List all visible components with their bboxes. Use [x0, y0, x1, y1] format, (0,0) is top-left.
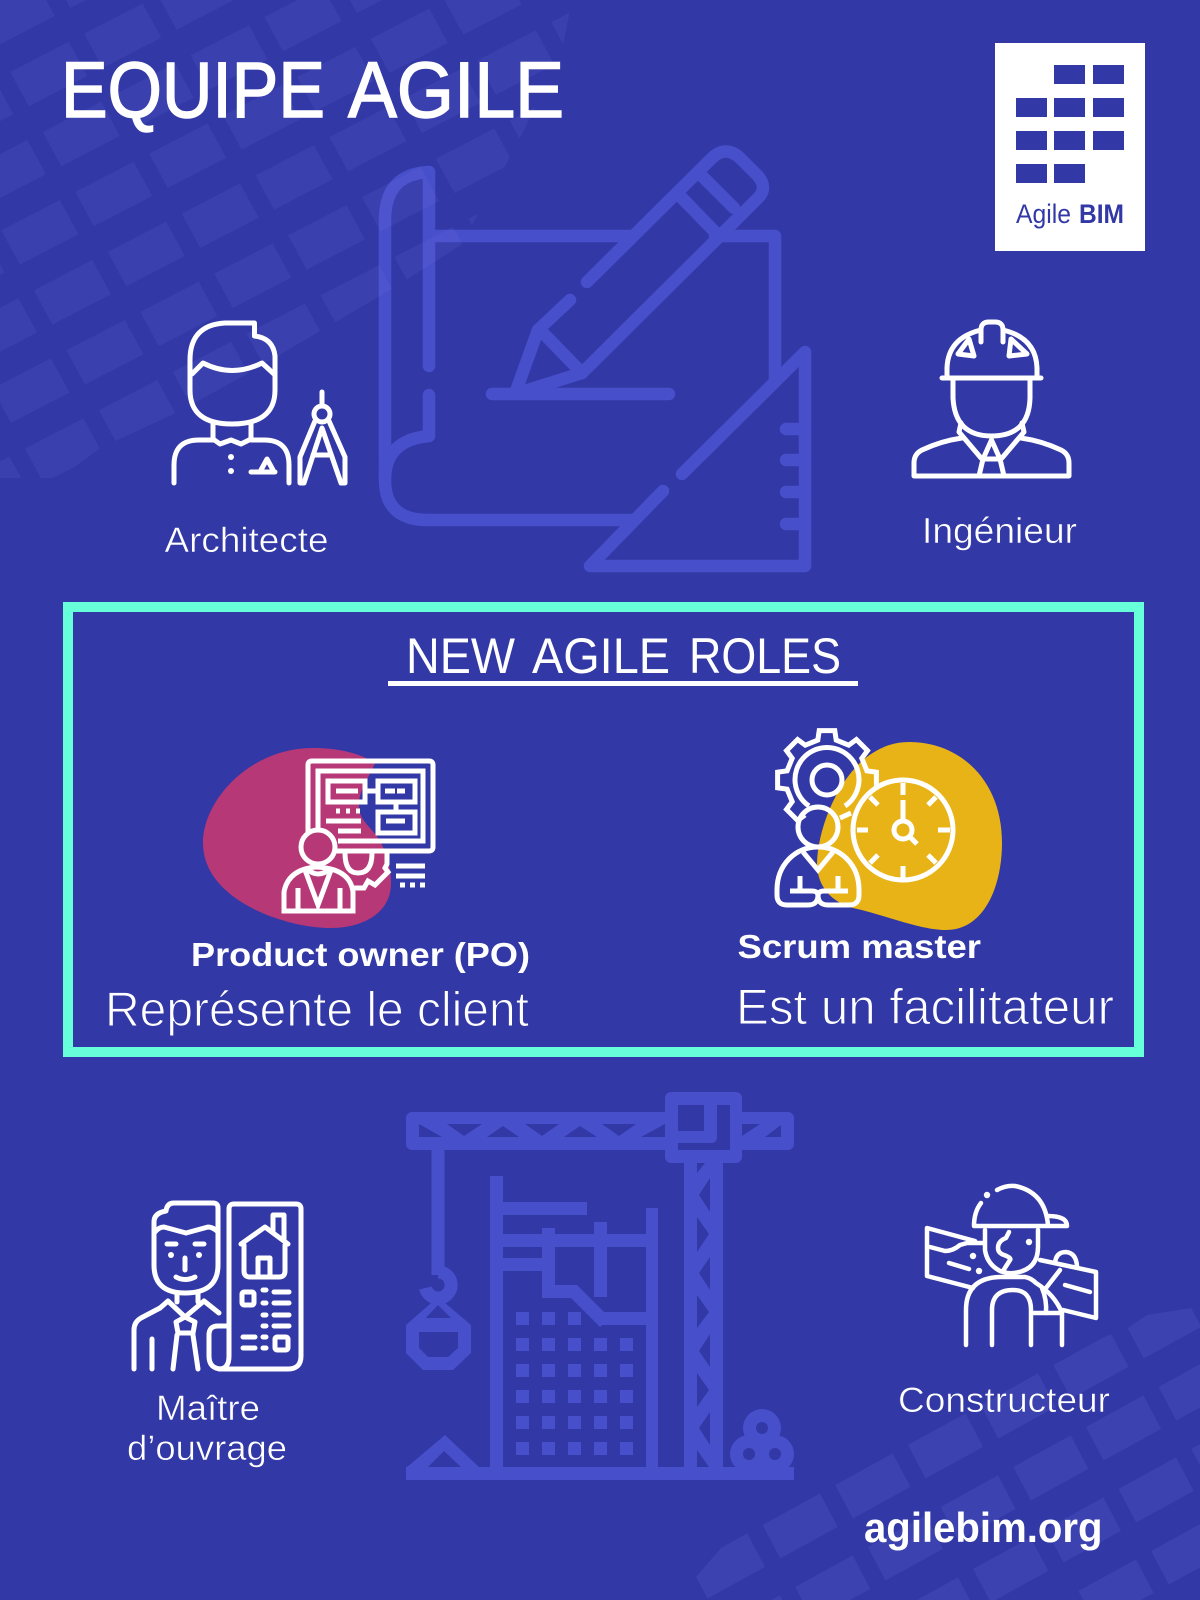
title: AGILE [348, 45, 564, 134]
icon: tower crane and building watermark [406, 1092, 794, 1480]
title: EQUIPE [61, 45, 325, 134]
logo: Agile BIM: Agile [1016, 199, 1071, 229]
logo: Agile BIM: BIM [1079, 199, 1124, 229]
icon: maitre d'ouvrage [134, 1203, 301, 1369]
heading: new agile roles: AGILE [532, 628, 670, 684]
heading underline [388, 681, 858, 686]
icon: product owner [284, 761, 433, 911]
icon: scrum master [777, 731, 953, 905]
icon: constructeur [927, 1186, 1096, 1345]
text: est un facilitateur: Est un facilitateur [736, 979, 1114, 1035]
text: represente le client: Représente le client [105, 983, 529, 1037]
icon: engineer [914, 322, 1069, 476]
blob: product owner [203, 748, 391, 928]
label: scrum master: Scrum master [738, 928, 981, 965]
logo: Agile BIM [995, 43, 1145, 251]
label: maitre d'ouvrage [127, 1389, 287, 1468]
footer: website: agilebim.org [864, 1504, 1102, 1551]
icon: architect [174, 323, 345, 483]
icon: blueprint, pencil and set square watermark [385, 152, 805, 566]
label: ingenieur: Ingénieur [922, 510, 1077, 551]
heading: new agile roles: NEW [406, 628, 516, 684]
label: maitre d'ouvrage: Maître [156, 1389, 260, 1428]
heading: new agile roles [406, 628, 841, 684]
heading: new agile roles: ROLES [689, 628, 841, 684]
title [61, 45, 564, 134]
label: constructeur: Constructeur [898, 1381, 1110, 1420]
label: product owner: Product owner (PO) [191, 936, 530, 973]
label: maitre d'ouvrage: d’ouvrage [127, 1429, 287, 1468]
blob: scrum master [817, 742, 1002, 930]
label: architecte: Architecte [164, 521, 328, 560]
panel: new agile roles [68, 607, 1139, 1052]
